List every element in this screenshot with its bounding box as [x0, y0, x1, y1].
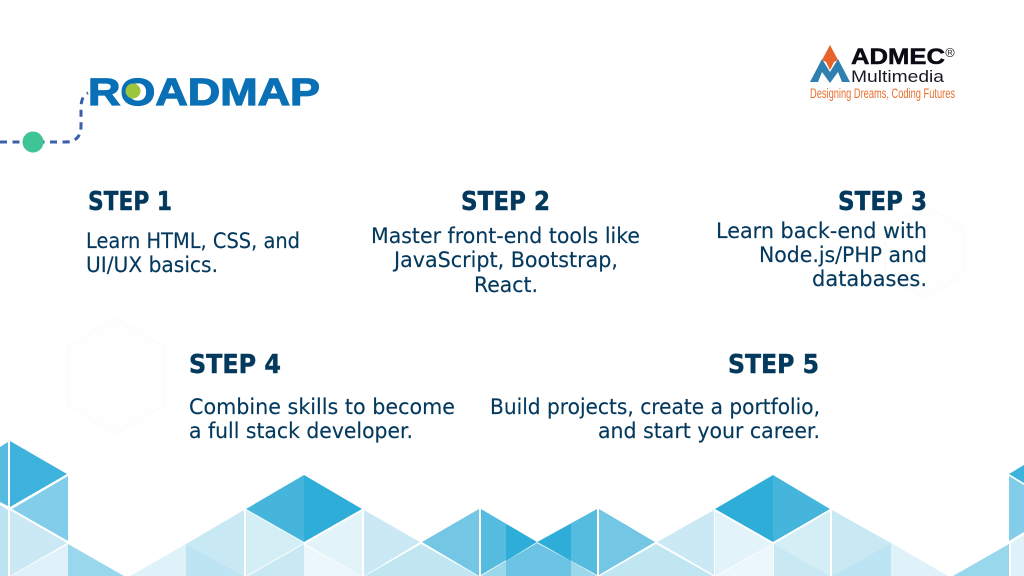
logo: ADMEC Multimedia: Multimedia	[851, 67, 945, 86]
left cluster	[0, 441, 124, 576]
faint background hexagons	[68, 205, 965, 434]
step 5: and start your career.	[598, 419, 820, 443]
dashed route line with node	[0, 93, 88, 152]
step 5	[490, 350, 820, 443]
step 3	[716, 187, 927, 291]
step 4: a full stack developer.	[189, 419, 413, 443]
step 4: Combine skills to become	[189, 395, 455, 419]
step 2: React.	[474, 273, 538, 297]
step 1: Learn HTML, CSS, and	[86, 229, 300, 253]
step 4: STEP 4	[189, 350, 281, 380]
logo: ADMEC Multimedia: R	[947, 50, 953, 57]
second cluster	[130, 475, 479, 576]
logo: ADMEC Multimedia: ADMEC	[851, 44, 945, 69]
step 3: STEP 3	[838, 187, 927, 217]
center cluster	[481, 509, 655, 576]
far right cluster	[953, 465, 1024, 576]
logo: ADMEC Multimedia	[810, 44, 955, 101]
step 3: databases.	[812, 267, 927, 291]
step 5: Build projects, create a portfolio,	[490, 395, 820, 419]
logo icon	[810, 45, 850, 83]
step 2	[371, 187, 640, 297]
logo: ADMEC Multimedia: Designing Dreams, Coding Futures	[810, 85, 955, 101]
step 2: Master front-end tools like	[371, 224, 640, 248]
step 1: STEP 1	[88, 187, 172, 217]
step 3: Learn back-end with	[716, 219, 927, 243]
step 3: Node.js/PHP and	[759, 243, 927, 267]
right cluster	[600, 475, 948, 576]
step 2: JavaScript, Bootstrap,	[392, 248, 618, 272]
step 4	[189, 350, 455, 443]
heading: roadmap: ROADMAP	[88, 72, 320, 114]
triangle mosaic footer	[0, 441, 1024, 576]
step 2: STEP 2	[461, 187, 550, 217]
step 1	[86, 187, 300, 277]
step 5: STEP 5	[728, 350, 819, 380]
step 1: UI/UX basics.	[86, 253, 218, 277]
